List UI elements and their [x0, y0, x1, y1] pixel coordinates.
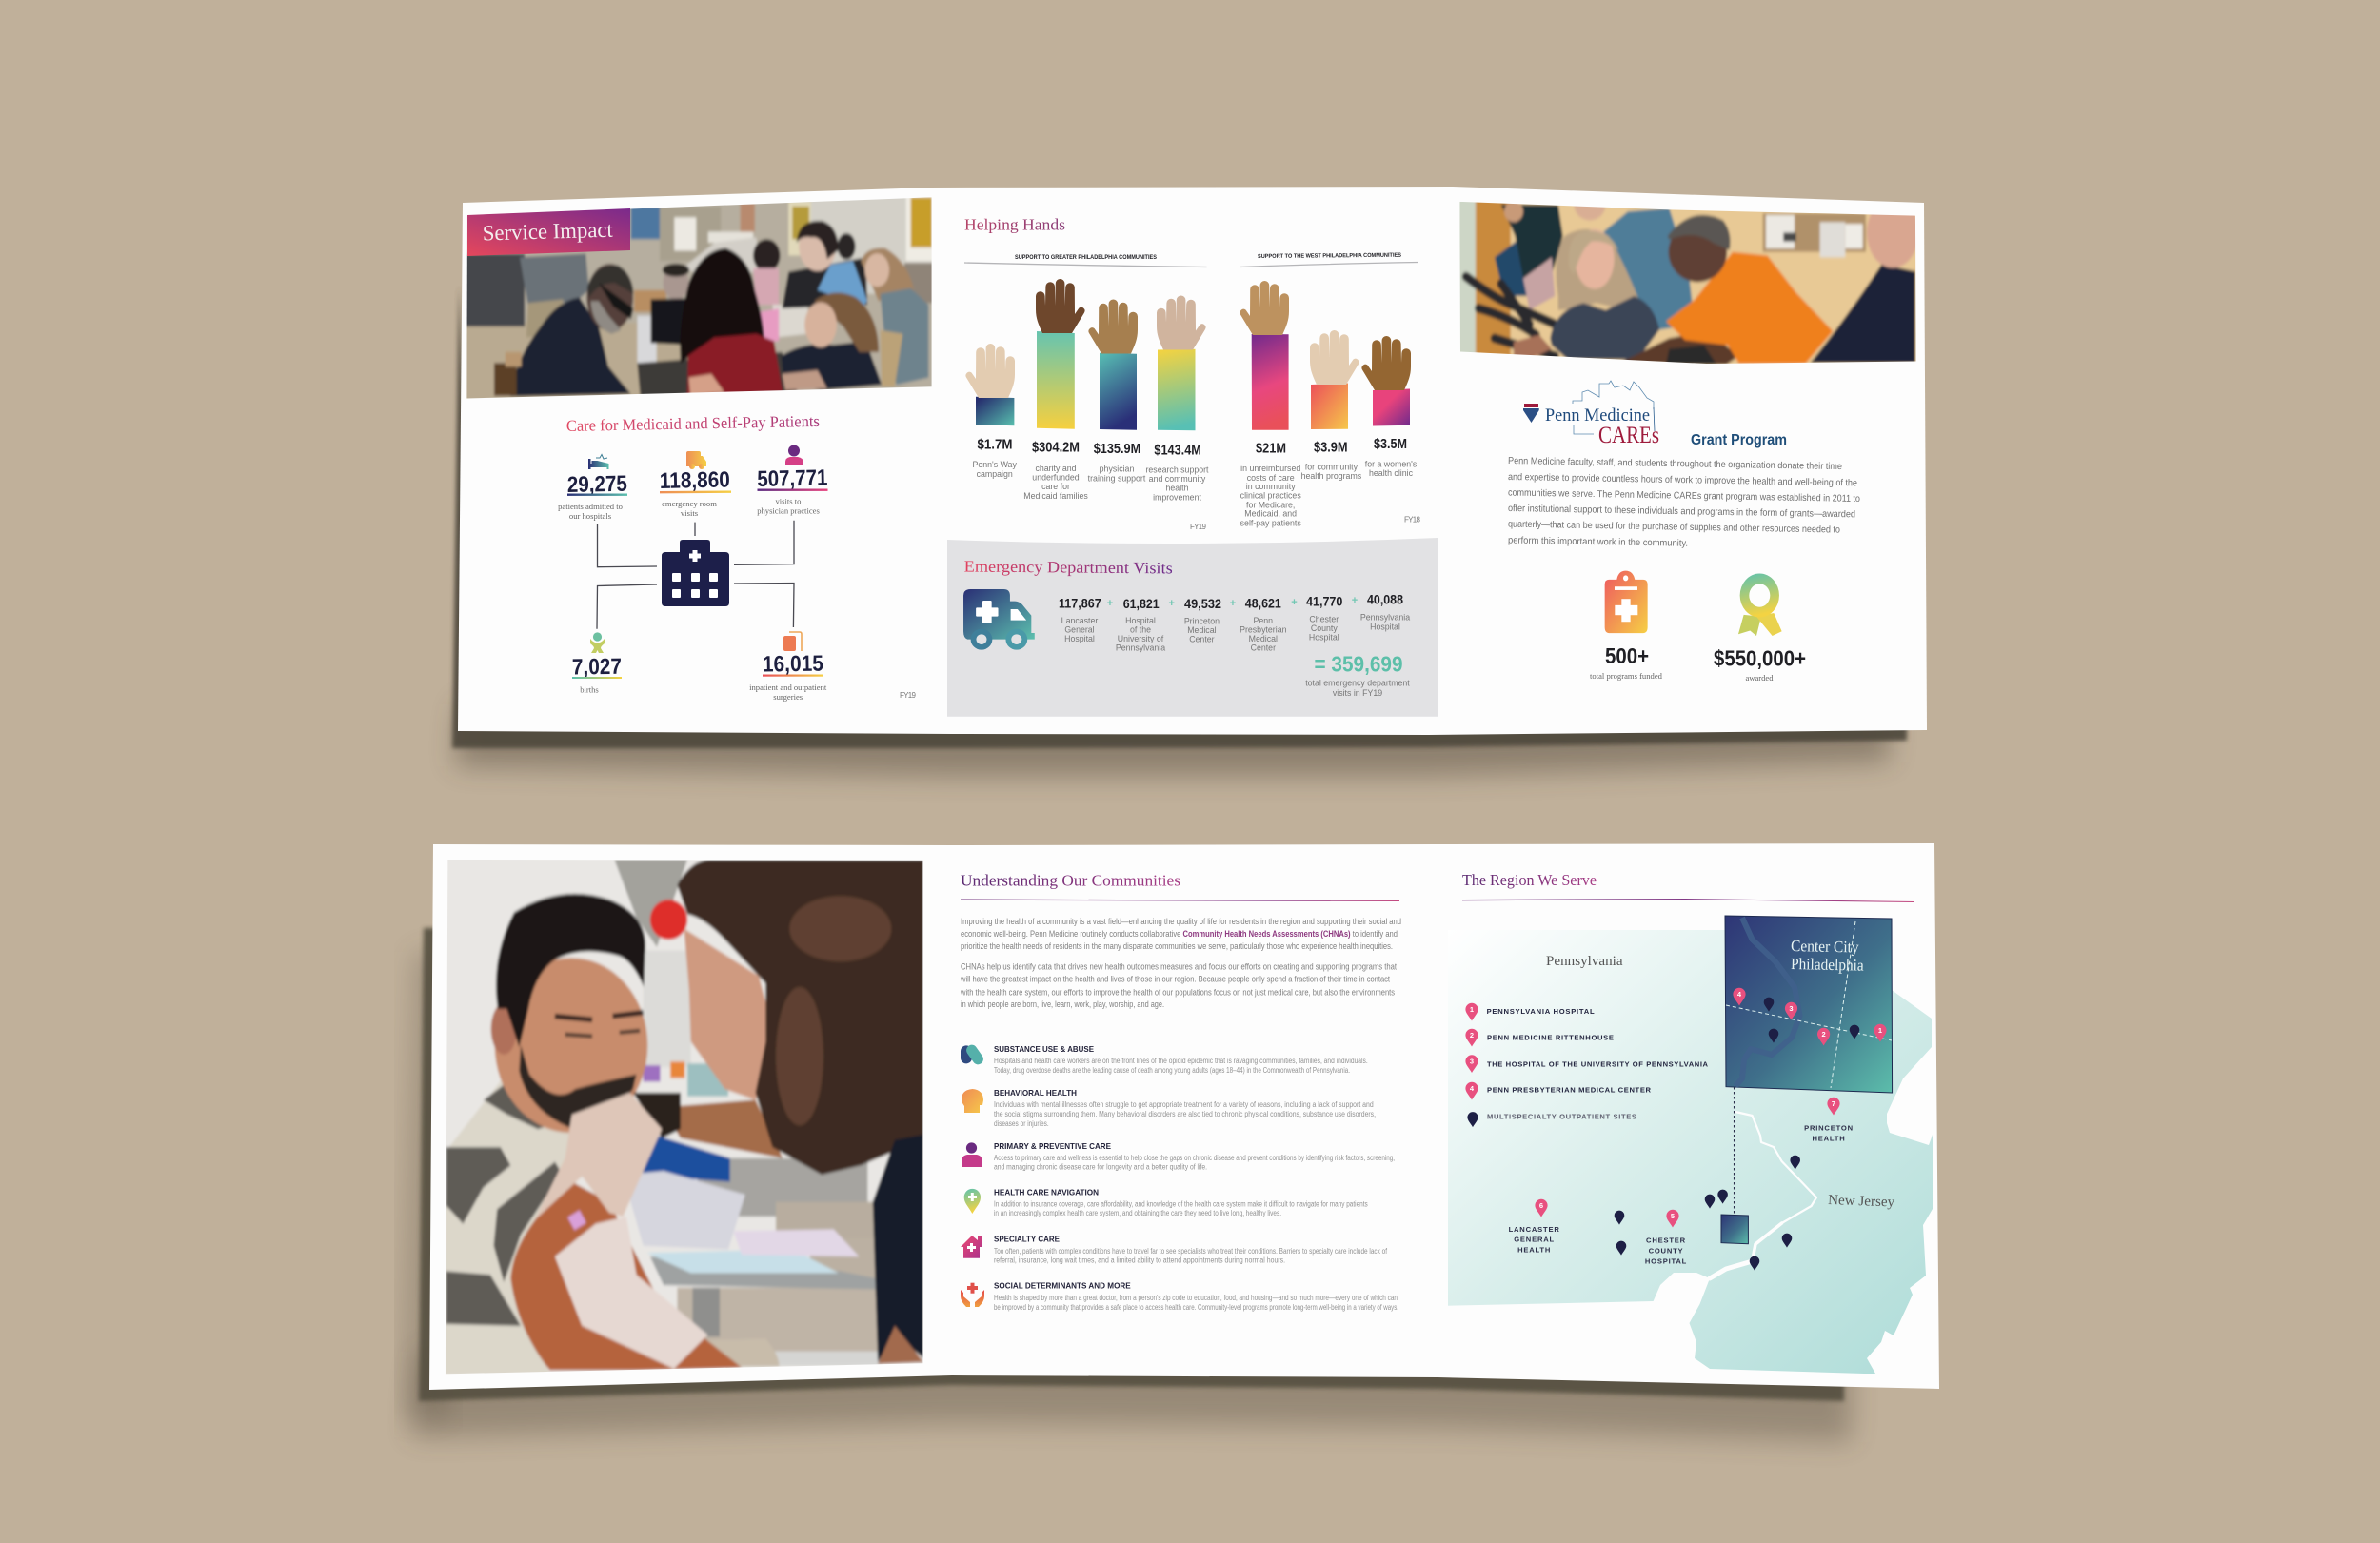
item: social determinants and more: Health is shaped by more than a great doctor, from a person's zip code to education, food, and housing—and so much more—every one of which can: [994, 1294, 1398, 1302]
map site: lancaster general health: GENERAL: [1514, 1236, 1555, 1244]
hospital counts: +: [1168, 598, 1175, 609]
hand bar: charity care: care for: [1041, 482, 1070, 491]
hospital labels: Pennsylvania: [1116, 643, 1165, 653]
item: health care navigation: in an increasingly complex health care system, and obtaining the care they need to live long, healthy lives.: [994, 1209, 1281, 1217]
hospital labels: Penn: [1254, 616, 1273, 625]
item: primary and preventive care: [962, 1141, 1395, 1171]
hospital counts: +: [1107, 598, 1113, 609]
hand bar: women's clinic: [1361, 336, 1418, 478]
map legend: 4: [1470, 1084, 1475, 1093]
intro paragraph 1: prioritize the health needs of residents in the many disparate communities we serve, particularly those who experience health inequities.: [961, 941, 1393, 951]
hand bar: charity care: underfunded: [1032, 473, 1080, 483]
map legend: PENN PRESBYTERIAN MEDICAL CENTER: [1487, 1086, 1652, 1095]
item: specialty care: referral, insurance, long wait times, and a limited ability to attend appointments during normal hours.: [994, 1256, 1285, 1264]
intro paragraph 1: Improving the health of a community is a vast field—enhancing the quality of life for residents in the region and supporting their social and: [961, 917, 1401, 926]
item: social determinants and more: SOCIAL DETERMINANTS AND MORE: [994, 1281, 1131, 1291]
subheading: greater philadelphia: [964, 255, 1207, 267]
total visits: [1305, 652, 1410, 698]
stat: surgeries: 16,015: [763, 651, 823, 676]
item: health care navigation: [964, 1188, 1368, 1217]
hand bar: physician training: physician: [1100, 465, 1134, 474]
panel: bottom brochure sheet: [429, 843, 1939, 1390]
hand bar: unreimbursed costs: self-pay patients: [1240, 518, 1301, 527]
map site: princeton health: [1804, 1098, 1854, 1142]
icon: small ambulance: [686, 451, 706, 469]
hospital counts: 40,088: [1367, 592, 1403, 607]
hospital labels: of the: [1130, 625, 1151, 635]
logo: penn medicine cares: [1523, 381, 1659, 448]
total visits: = 359,699: [1314, 652, 1403, 677]
icon: location pin: [964, 1189, 981, 1214]
footnote FY18: FY18: [1404, 516, 1421, 524]
map: center city inset: [1725, 916, 1893, 1093]
heading: Understanding Our Communities: [961, 872, 1180, 890]
hospital counts: 117,867: [1059, 595, 1101, 610]
item: behavioral health: BEHAVIORAL HEALTH: [994, 1088, 1077, 1098]
hand bar: charity care: Medicaid families: [1023, 491, 1088, 501]
hand bar: penn's way: $1.7M: [977, 438, 1013, 453]
hand bar: research support: research support: [1145, 465, 1209, 474]
icon: house: [961, 1236, 982, 1258]
item: specialty care: SPECIALTY CARE: [994, 1234, 1060, 1243]
hand bar: research support: and community: [1149, 474, 1206, 484]
hand bar: penn's way: [965, 344, 1017, 479]
intro paragraph 1: economic well-being. Penn Medicine routinely conducts collaborative Community Health Needs Assessments (CHNAs) to identify and: [961, 929, 1398, 939]
stat: patients admitted: patients admitted to: [558, 502, 623, 511]
heading: Helping Hands: [964, 215, 1065, 234]
hand bar: unreimbursed costs: costs of care: [1247, 473, 1295, 483]
footnote FY19: FY19: [1190, 523, 1207, 531]
hand bar: charity care: charity and: [1035, 464, 1077, 473]
map: center city inset: 3: [1789, 1004, 1794, 1013]
heading: The Region We Serve: [1462, 871, 1597, 889]
hand bar: unreimbursed costs: clinical practices: [1240, 491, 1301, 501]
body text: offer institutional support to these individuals and programs in the form of grants—awarded: [1508, 504, 1855, 520]
map site: chester county hospital: HOSPITAL: [1645, 1256, 1687, 1265]
hand bar: women's clinic: $3.5M: [1374, 437, 1407, 452]
hand bar: physician training: [1088, 299, 1146, 483]
map: land: [1448, 930, 1933, 1374]
stat: surgeries: [749, 632, 827, 702]
hospital labels: Center: [1189, 635, 1215, 644]
hospital counts: 41,770: [1306, 594, 1343, 609]
hand bar: charity care: [1023, 279, 1088, 501]
stat: programs funded: total programs funded: [1590, 671, 1663, 681]
hospital labels: Hospital: [1309, 633, 1339, 643]
icon: blood bag: [783, 632, 802, 651]
map site: princeton health: 7: [1832, 1099, 1835, 1108]
map site: princeton health: PRINCETON: [1804, 1124, 1854, 1133]
hospital labels: University of: [1118, 634, 1164, 643]
stat: births: [572, 632, 622, 695]
map legend: 2: [1470, 1031, 1474, 1039]
stat: patients admitted: [558, 455, 627, 521]
icon: hospital: [662, 540, 729, 606]
icon: bed: [588, 455, 609, 469]
hand bar: unreimbursed costs: [1240, 281, 1301, 527]
hospital counts: +: [1230, 598, 1236, 609]
hospital labels: Center: [1251, 643, 1276, 653]
photo: service impact clinic: [464, 191, 937, 403]
stat: emergency room visits: visits: [681, 508, 699, 518]
map site: princeton health: HEALTH: [1812, 1134, 1846, 1142]
map legend: 1: [1470, 1005, 1474, 1014]
subheading: west philadelphia: SUPPORT TO THE WEST PHILADELPHIA COMMUNITIES: [1258, 253, 1401, 260]
shadow: top brochure: [452, 286, 1907, 776]
body text: communities we serve. The Penn Medicine CAREs grant program was established in 2011 to: [1508, 488, 1860, 504]
item: social determinants and more: [961, 1281, 1398, 1312]
stat: surgeries: inpatient and outpatient: [749, 682, 827, 692]
map: center city inset: 1: [1878, 1026, 1882, 1035]
total visits: total emergency department: [1305, 679, 1410, 688]
hospital labels: Chester: [1309, 615, 1339, 624]
item: substance use and abuse: SUBSTANCE USE & ABUSE: [994, 1044, 1094, 1054]
icon: doctor: [785, 445, 803, 465]
stat: programs funded: 500+: [1605, 643, 1649, 668]
subheading: west philadelphia: [1240, 253, 1418, 267]
heading: Care for Medicaid and Self-Pay Patients: [566, 412, 820, 435]
stat: amount awarded: awarded: [1745, 673, 1774, 682]
logo: penn medicine cares: Penn Medicine: [1545, 406, 1650, 425]
map: dotted connector: [1734, 1087, 1735, 1214]
panel: emergency department visits: [947, 538, 1438, 717]
map legend: PENN MEDICINE RITTENHOUSE: [1487, 1033, 1614, 1041]
icon: baby: [590, 632, 605, 653]
intro paragraph 2: will have the greatest impact on the health and lives of those in our region. Because people only spend a fraction of their time in contact: [960, 975, 1390, 984]
item: behavioral health: Individuals with mental illnesses often struggle to get appropriate treatment for a variety of reasons, including a lack of support and: [994, 1100, 1374, 1109]
hospital labels: Medical: [1249, 634, 1278, 643]
stat: patients admitted: 29,275: [567, 471, 627, 497]
stat: surgeries: surgeries: [773, 692, 803, 702]
total visits: visits in FY19: [1333, 688, 1382, 698]
icon: hands with cross: [961, 1283, 984, 1307]
map: delaware river: [1710, 1112, 1816, 1278]
map site: chester county hospital: CHESTER: [1646, 1236, 1686, 1245]
hospital labels: Hospital: [1064, 634, 1095, 643]
stat: amount awarded: $550,000+: [1714, 645, 1806, 670]
map: [1448, 916, 1933, 1374]
body text: quarterly—that can be used for the purchase of supplies and other resources needed to: [1508, 520, 1840, 536]
photo: vaccination: [443, 856, 925, 1376]
icon: clipboard: [1605, 571, 1648, 633]
hospital labels: Lancaster: [1061, 616, 1098, 625]
connector lines: [597, 521, 794, 629]
stat: births: births: [580, 685, 599, 695]
body text: Penn Medicine faculty, staff, and students throughout the organization donate their time: [1508, 456, 1842, 472]
hand bar: research support: [1145, 295, 1209, 502]
intro paragraph 2: CHNAs help us identify data that drives new health outcomes measures and focus our efforts on creating and supporting programs that: [961, 961, 1397, 971]
map legend: [1465, 1003, 1709, 1127]
banner title: Service Impact: [482, 218, 614, 245]
item: behavioral health: diseases or injuries.: [994, 1119, 1049, 1128]
map site: lancaster general health: LANCASTER: [1509, 1225, 1560, 1234]
map label: new jersey: New Jersey: [1828, 1193, 1895, 1210]
item: specialty care: Too often, patients with complex conditions have to travel far to see specialists who treat their conditions. Barriers to specialty care include lack of: [994, 1247, 1388, 1256]
item: primary and preventive care: PRIMARY & PREVENTIVE CARE: [994, 1141, 1111, 1151]
map site: lancaster general health: HEALTH: [1517, 1245, 1551, 1254]
hospital labels: Medical: [1187, 625, 1217, 635]
item: social determinants and more: be improved by a community that provides a safe place to access health care. Community-level programs promote long-term well-being in a variety of ways.: [994, 1303, 1398, 1312]
panel: top brochure sheet: [458, 187, 1927, 735]
hand bar: penn's way: Penn's Way: [973, 460, 1017, 469]
heading rule: [1462, 899, 1914, 902]
hand bar: unreimbursed costs: $21M: [1256, 442, 1286, 457]
hospital counts: +: [1291, 597, 1298, 608]
photo: exercise class: [1460, 202, 1915, 364]
map: center city inset: Philadelphia: [1791, 955, 1864, 975]
heading: Emergency Department Visits: [964, 558, 1173, 577]
item: behavioral health: the social stigma surrounding them. Many behavioral disorders are also tied to chronic physical conditions, substance use disorders,: [994, 1110, 1376, 1118]
icon: ribbon: [1738, 574, 1782, 636]
stat: physician practice visits: 507,771: [757, 465, 828, 491]
stat: emergency room visits: emergency room: [662, 499, 717, 508]
item: primary and preventive care: and managing chronic disease care for longevity and a better quality of life.: [994, 1162, 1207, 1171]
map site: lancaster general health: 6: [1539, 1201, 1543, 1210]
map legend: PENNSYLVANIA HOSPITAL: [1487, 1007, 1595, 1016]
hospital labels: Princeton: [1184, 617, 1220, 626]
body text: [1508, 456, 1860, 549]
hand bar: unreimbursed costs: in unreimbursed: [1240, 464, 1300, 473]
icon: pills: [961, 1042, 985, 1067]
stat: patients admitted: our hospitals: [569, 511, 612, 521]
panel: the region we serve: [1448, 871, 1933, 1374]
hospital labels: General: [1064, 625, 1095, 635]
map: locator square: [1721, 1215, 1748, 1244]
panel: helping hands: [964, 215, 1421, 531]
subheading: greater philadelphia: SUPPORT TO GREATER PHILADELPHIA COMMUNITIES: [1015, 255, 1157, 261]
intro paragraph 2: in which people are born, live, learn, work, play, worship, and age.: [961, 999, 1164, 1009]
heading: Grant Program: [1691, 432, 1787, 448]
map: center city inset: 4: [1737, 990, 1742, 999]
hospital counts: 48,621: [1245, 595, 1281, 610]
map label: pennsylvania: Pennsylvania: [1546, 954, 1623, 969]
map site: lancaster general health: [1509, 1199, 1560, 1254]
hand bar: women's clinic: health clinic: [1369, 468, 1414, 478]
hand bar: unreimbursed costs: Medicaid, and: [1244, 509, 1297, 519]
hand bar: community health programs: $3.9M: [1314, 440, 1348, 455]
item: health care navigation: HEALTH CARE NAVIGATION: [994, 1188, 1099, 1197]
stat: emergency room visits: [660, 451, 731, 518]
hospital counts: [1059, 592, 1403, 611]
map: center city inset: 2: [1822, 1030, 1826, 1039]
icon: doctor: [962, 1142, 982, 1167]
panel: penn medicine cares grant program: [1508, 381, 1860, 682]
body text: and expertise to provide countless hours of work to improve the health and well-being of the: [1508, 472, 1857, 488]
footnote FY19: FY19: [900, 691, 917, 700]
item: substance use and abuse: [961, 1042, 1368, 1075]
item: behavioral health: [962, 1088, 1376, 1128]
stat: physician practice visits: visits to: [776, 497, 801, 506]
map: outpatient site pins: [1615, 1156, 1800, 1271]
shadow: bottom brochure: [400, 928, 1852, 1442]
hospital labels: Hospital: [1370, 622, 1400, 631]
intro paragraph 2: [960, 961, 1397, 1009]
hand bar: women's clinic: for a women's: [1365, 459, 1418, 468]
hospital labels: Hospital: [1125, 616, 1156, 625]
hospital labels: County: [1311, 623, 1338, 633]
icon: head: [962, 1089, 983, 1113]
map legend: THE HOSPITAL OF THE UNIVERSITY OF PENNSYLVANIA: [1487, 1059, 1709, 1068]
intro paragraph 2: with the health care system, our efforts to improve the health of our populations focus on not just medical care, but also the environments: [960, 988, 1395, 998]
hand bar: charity care: $304.2M: [1032, 440, 1080, 455]
hand bar: research support: health: [1166, 484, 1189, 493]
hospital counts: +: [1352, 595, 1358, 606]
stat: physician practice visits: physician practices: [757, 506, 820, 516]
map site: chester county hospital: 5: [1671, 1212, 1675, 1220]
icon: ambulance: [963, 589, 1035, 650]
hand bar: community health programs: health programs: [1301, 471, 1362, 481]
map site: chester county hospital: [1645, 1210, 1687, 1265]
hospital counts: 61,821: [1123, 596, 1160, 611]
hospital labels: Pennsylvania: [1360, 613, 1410, 623]
map: center city inset: Center City: [1791, 937, 1859, 957]
body text: perform this important work in the community.: [1508, 536, 1688, 549]
item: specialty care: [961, 1234, 1388, 1264]
item: primary and preventive care: Access to primary care and wellness is essential to help close the gaps on chronic disease and prevent conditions by identifying risk factors, screening,: [994, 1154, 1395, 1162]
item: substance use and abuse: Today, drug overdose deaths are the leading cause of death among young adults (ages 18–44) in the Commonwealth of Pennsylvania.: [994, 1066, 1350, 1075]
item: health care navigation: In addition to insurance coverage, care affordability, and knowledge of the health care system make it difficult to navigate for many patients: [994, 1199, 1368, 1208]
hand bar: physician training: $135.9M: [1094, 442, 1140, 457]
hand bar: community health programs: for community: [1305, 463, 1359, 472]
map legend: 3: [1470, 1057, 1474, 1066]
stat: emergency room visits: 118,860: [660, 466, 730, 493]
hand bar: penn's way: campaign: [977, 469, 1013, 479]
stat: amount awarded: [1714, 574, 1806, 682]
hand bar: unreimbursed costs: for Medicare,: [1246, 500, 1295, 509]
hand bar: research support: improvement: [1153, 492, 1201, 502]
stat: programs funded: [1590, 571, 1663, 681]
hand bar: research support: $143.4M: [1154, 443, 1201, 458]
map legend: MULTISPECIALTY OUTPATIENT SITES: [1487, 1113, 1636, 1121]
hand bar: physician training: training support: [1088, 473, 1146, 483]
panel: care for medicaid and self-pay patients: [558, 412, 917, 702]
map site: chester county hospital: COUNTY: [1649, 1246, 1683, 1255]
hand bar: unreimbursed costs: in community: [1246, 482, 1296, 491]
intro paragraph 1: [961, 917, 1401, 951]
hand bar: community health programs: [1301, 330, 1362, 481]
logo: penn medicine cares: CAREs: [1598, 423, 1659, 448]
stat: births: 7,027: [572, 654, 622, 679]
title banner: [467, 208, 630, 256]
panel: understanding our communities: [960, 872, 1401, 1312]
hospital counts: 49,532: [1184, 596, 1221, 611]
heading rule: [961, 899, 1399, 901]
hospital labels: [1061, 613, 1410, 653]
stat: physician practice visits: [757, 445, 828, 516]
item: substance use and abuse: Hospitals and health care workers are on the front lines of the opioid epidemic that is ravaging communities, families, and individuals.: [994, 1057, 1368, 1065]
hospital labels: Presbyterian: [1240, 624, 1287, 634]
